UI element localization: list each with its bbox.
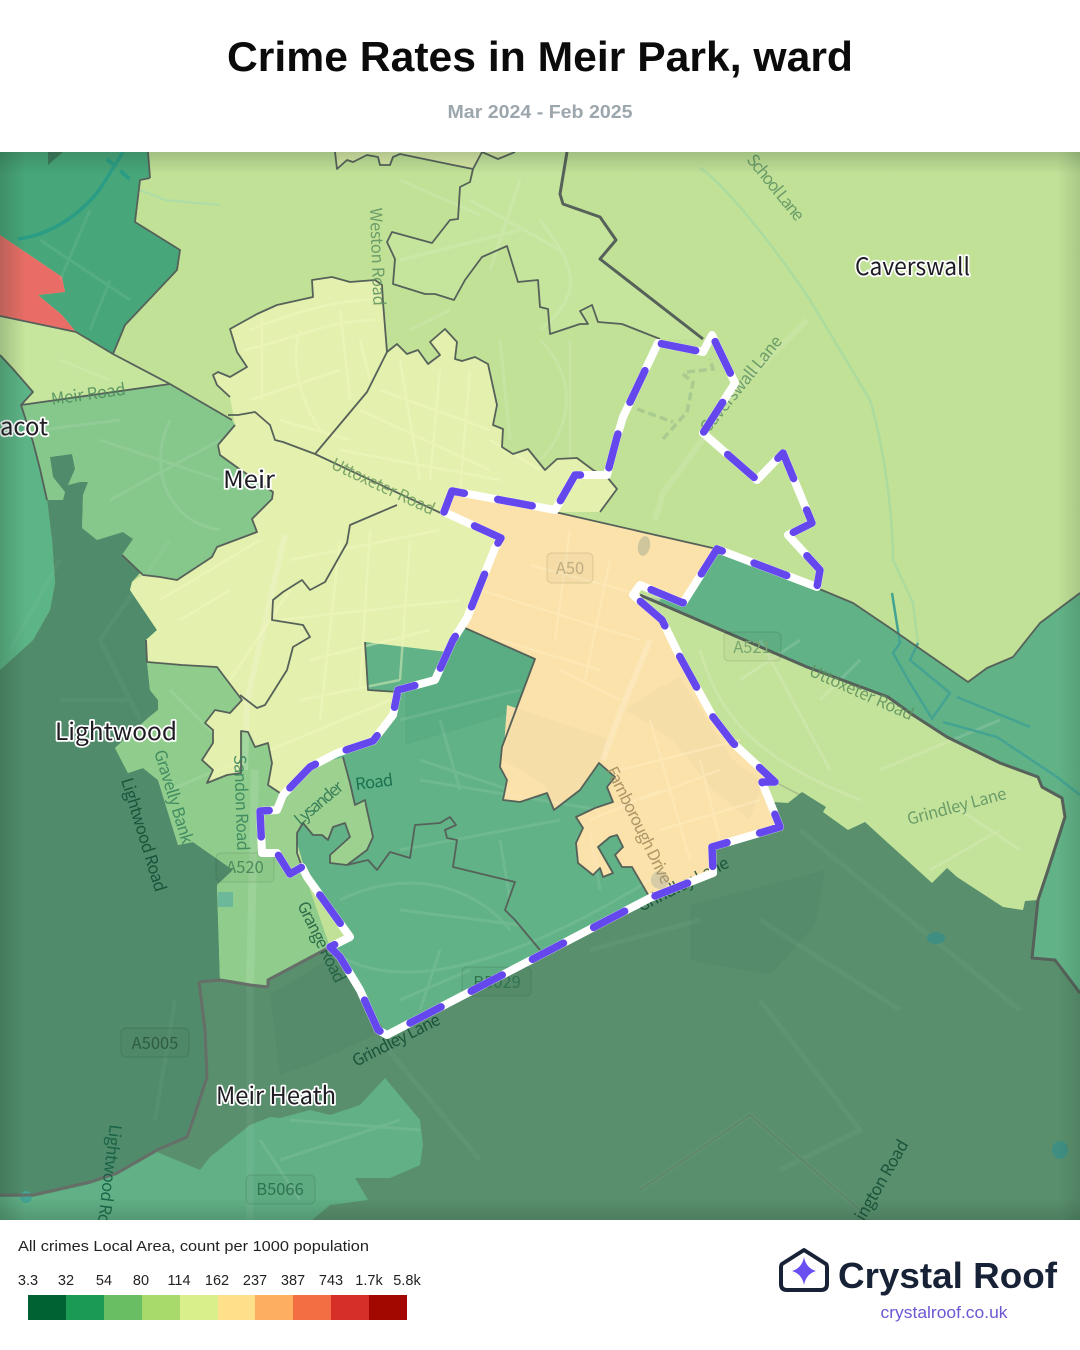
legend scale values: 54 xyxy=(96,1273,112,1289)
area: darker southern patches xyxy=(378,1020,383,1028)
logo: Crystal Roof xyxy=(781,1250,1058,1322)
road labels: Grindley Lane xyxy=(904,780,1009,830)
road shields: B5029 xyxy=(473,969,521,993)
road labels xyxy=(49,148,1009,1243)
area: east mid-green band xyxy=(640,552,1080,993)
legend scale values: 162 xyxy=(205,1273,229,1289)
area: far-left green ward xyxy=(0,355,55,670)
area: Meir Heath green xyxy=(0,1078,423,1222)
road labels: Meir Road xyxy=(49,376,127,410)
area: east Grindley Lane ward xyxy=(632,595,1065,910)
ponds and small water features xyxy=(20,152,1068,1203)
area: darker green band xyxy=(405,628,535,745)
legend scale values: 32 xyxy=(58,1273,74,1289)
legend colour swatches xyxy=(28,1295,407,1320)
road labels: Grindley Lane xyxy=(632,850,732,916)
road labels: Lightwood Road xyxy=(91,1123,129,1243)
ward boundary lines xyxy=(0,152,1080,1210)
area: top-left green ward xyxy=(0,152,180,354)
road shields: B5066 xyxy=(256,1176,304,1200)
area: Meir pale-yellow ward xyxy=(130,277,617,795)
website link: crystalroof.co.uk xyxy=(880,1304,1008,1322)
title: Crime Rates in Meir Park, ward xyxy=(227,33,853,80)
road labels: Sandon Road xyxy=(229,754,256,851)
road shields: A50 xyxy=(556,555,584,579)
area: top pale patch xyxy=(335,152,515,169)
place label: Meir: Meir xyxy=(223,460,276,495)
road shields: A521 xyxy=(733,634,771,658)
water courses xyxy=(18,152,1080,795)
legend title: All crimes Local Area, count per 1000 population xyxy=(18,1239,369,1255)
area: darker orange bands xyxy=(504,705,599,767)
road labels: Weston Road xyxy=(365,207,392,306)
footpath near Caverswall Lane xyxy=(637,359,713,439)
ward outline: Meir Park dashed boundary xyxy=(260,335,820,1035)
legend scale values: 743 xyxy=(319,1273,343,1289)
legend scale values: 3.3 xyxy=(18,1273,38,1289)
legend scale values: 80 xyxy=(133,1273,149,1289)
road labels: Gravelly Bank xyxy=(149,746,201,846)
road labels: School Lane xyxy=(742,148,811,225)
legend scale values: 387 xyxy=(281,1273,305,1289)
area: Lightwood mid-green ward xyxy=(115,662,330,987)
area: Meir Road strip xyxy=(0,316,170,405)
area: ward south mid-green xyxy=(283,628,650,1035)
road labels: Road xyxy=(354,767,394,795)
legend scale values: 1.7k xyxy=(355,1273,383,1289)
area: dark western ward xyxy=(0,454,233,1195)
place label: Lightwood: Lightwood xyxy=(55,712,177,747)
logo wordmark: Crystal Roof xyxy=(838,1255,1058,1296)
place label: Caverswall: Caverswall xyxy=(855,247,970,282)
subtitle: date range: Mar 2024 - Feb 2025 xyxy=(448,101,632,122)
road labels: Lightwood Road xyxy=(116,774,174,894)
road shields: A5005 xyxy=(132,1030,178,1054)
area: red high-crime ward xyxy=(0,235,76,332)
road labels: Grindley Lane xyxy=(347,1006,444,1071)
place label: cut-off Blurton acot: acot xyxy=(0,407,48,442)
street network xyxy=(10,180,1020,1220)
area: Lysander pale green xyxy=(260,757,373,874)
road labels: Caverswall Lane xyxy=(693,330,787,437)
legend scale values xyxy=(18,1273,421,1289)
legend scale values: 114 xyxy=(167,1273,191,1289)
icon: house with star xyxy=(781,1250,827,1290)
area: ward orange section xyxy=(444,491,780,898)
map edge vignette xyxy=(0,152,1080,1220)
legend scale values: 237 xyxy=(243,1273,267,1289)
road labels: Uttoxeter Road xyxy=(806,658,918,725)
area: dark southern ward xyxy=(0,792,1080,1220)
place label: Meir Heath: Meir Heath xyxy=(216,1076,336,1111)
road labels: Grange Road xyxy=(293,897,353,986)
road shields xyxy=(121,553,781,1204)
area: west mid-green ward xyxy=(21,384,273,580)
area: north green ward xyxy=(387,152,703,339)
road shields: A520 xyxy=(226,854,264,878)
road labels: Lysander xyxy=(288,774,348,830)
road labels: ington Road xyxy=(848,1135,913,1224)
road labels: Uttoxeter Road xyxy=(328,451,440,520)
legend scale values: 5.8k xyxy=(393,1273,421,1289)
legend xyxy=(18,1239,421,1320)
road labels: Farnborough Drive xyxy=(602,762,679,887)
